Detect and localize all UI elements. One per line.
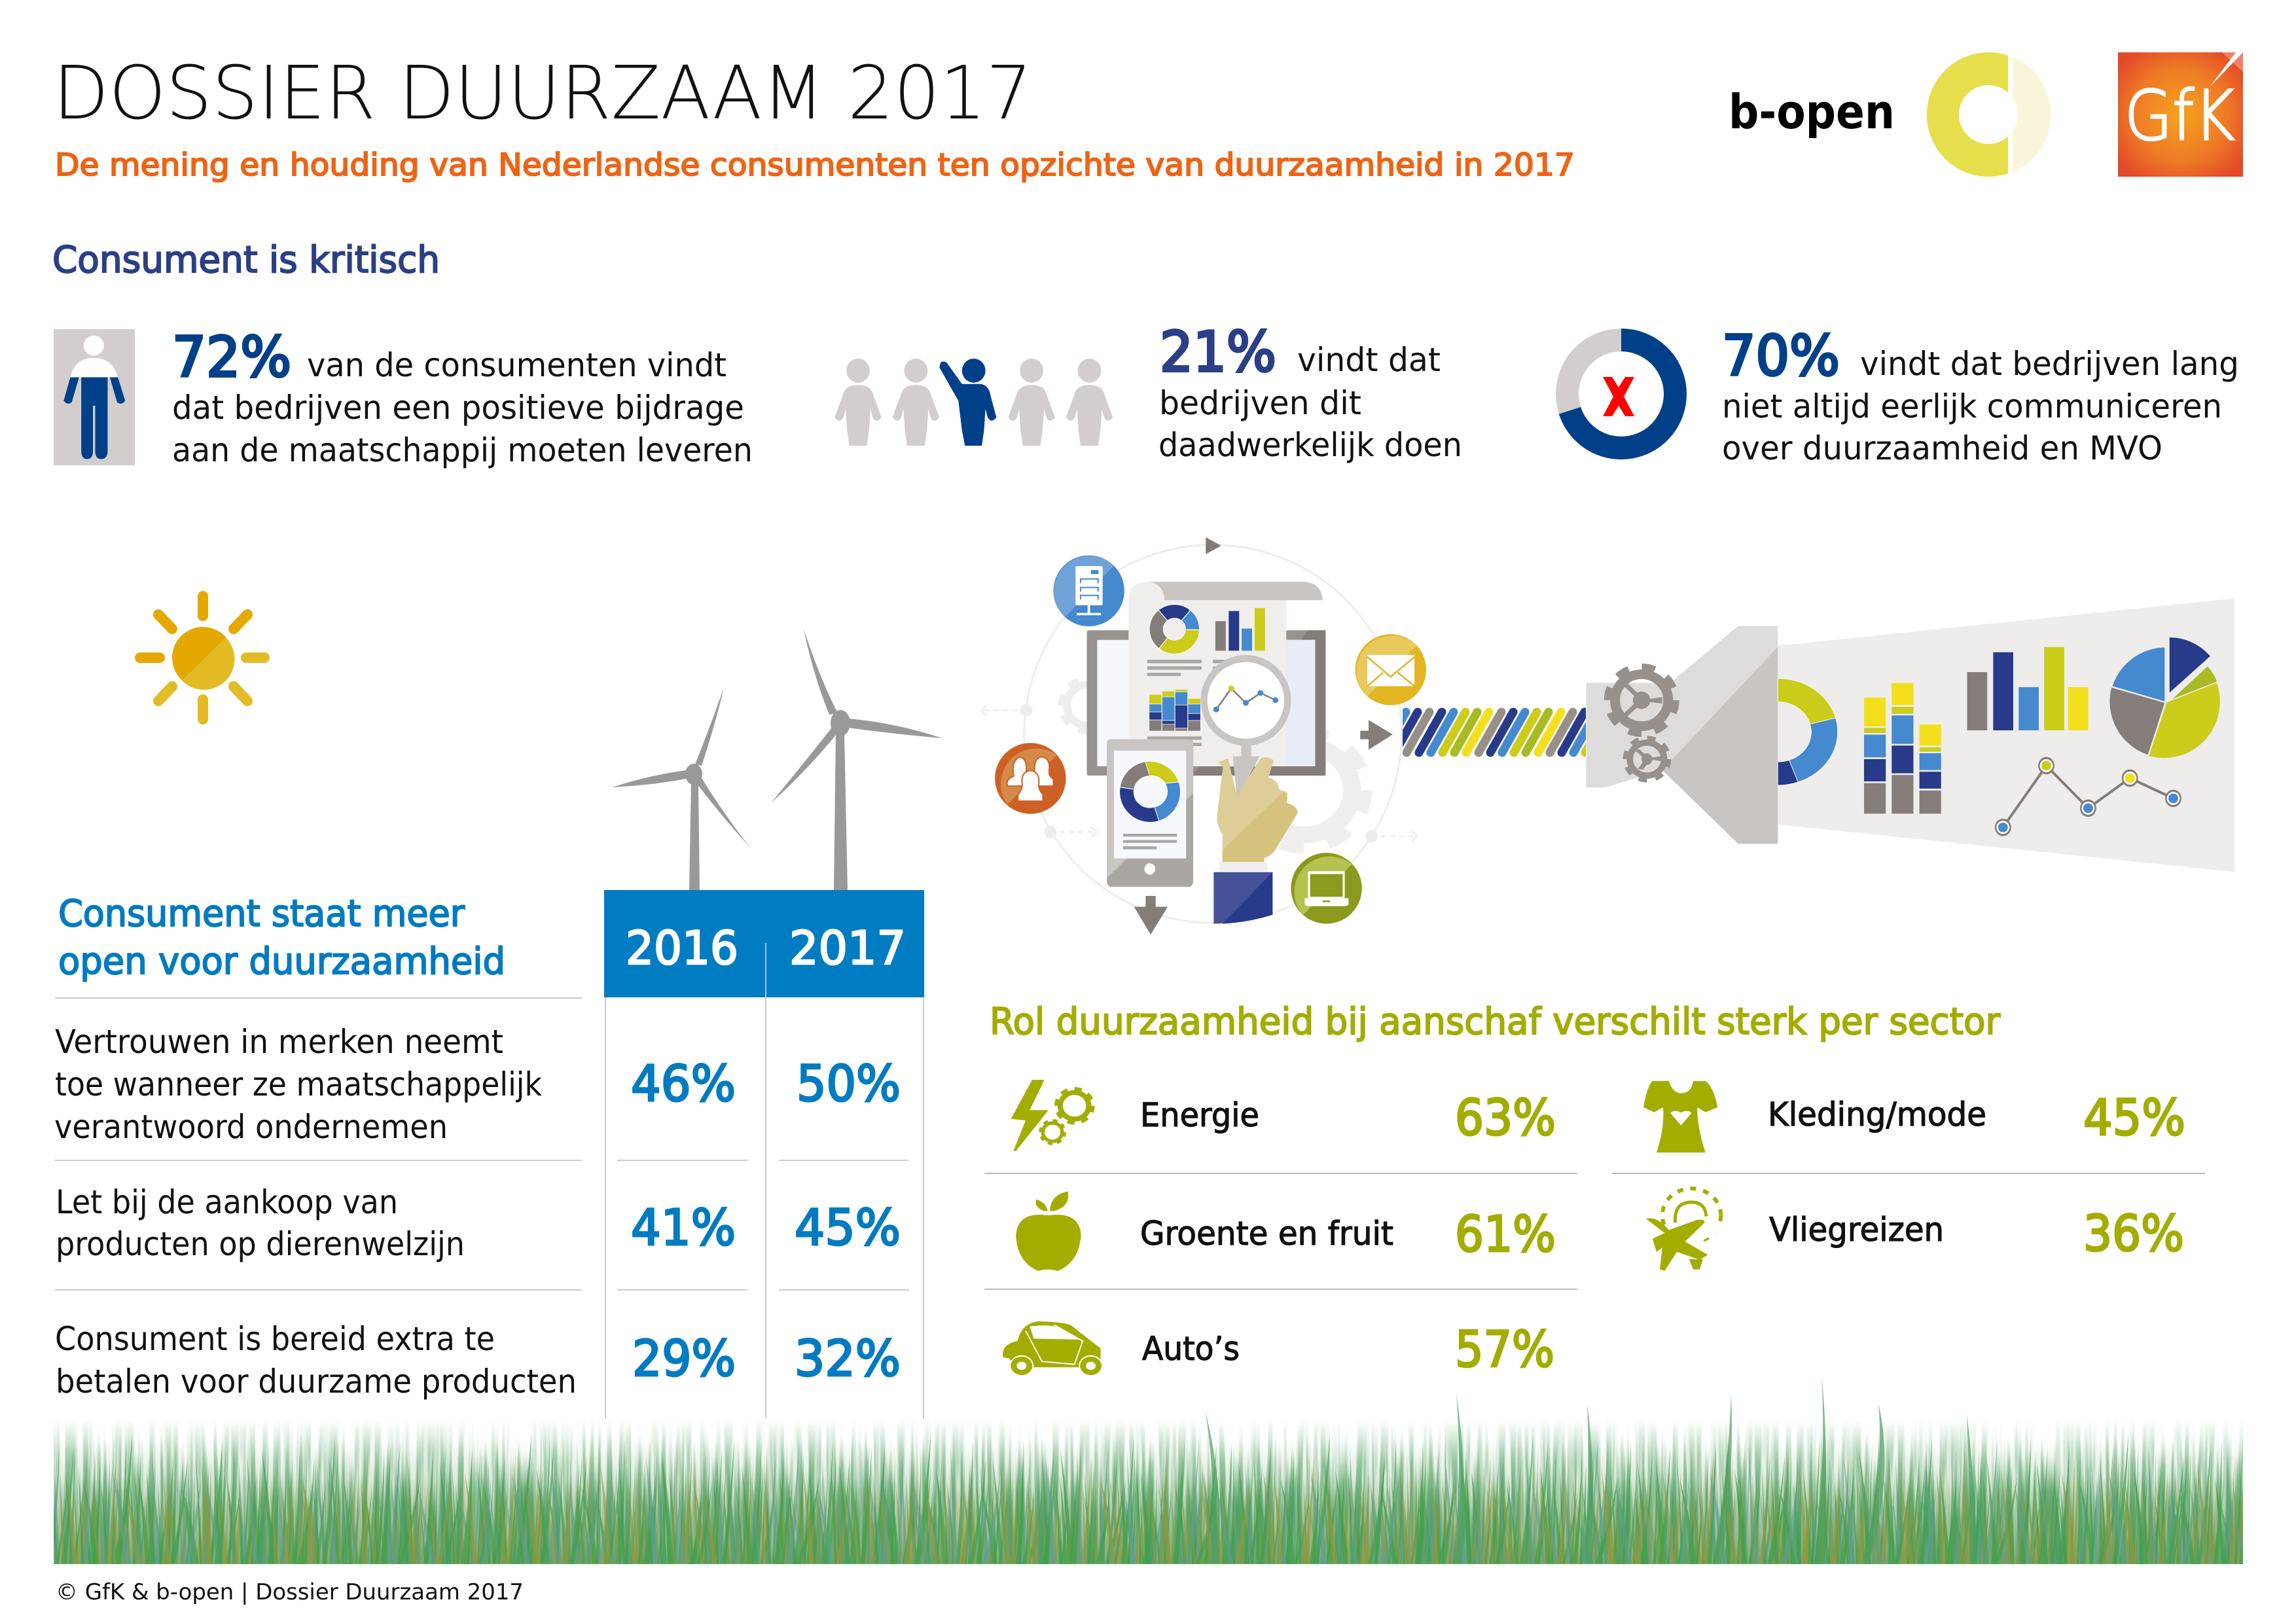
stat: 21 percent: 21% (1160, 320, 1276, 385)
stat: 72 percent: aan de maatschappij moeten leveren (172, 431, 753, 469)
stat: 70 percent: niet altijd eerlijk communiceren (1722, 387, 2222, 425)
stat: 70 percent: 70% (1722, 324, 1840, 389)
arrow: right (1360, 720, 1393, 750)
row: kleding (1643, 1081, 2185, 1152)
gears (1608, 668, 1675, 780)
row: kleding: Kleding/mode (1768, 1096, 1986, 1133)
icon: five people, one raised hand (834, 359, 1113, 446)
funnel (1587, 626, 1778, 844)
row: energie (1011, 1080, 1556, 1151)
row: vliegreizen: Vliegreizen (1769, 1211, 1944, 1249)
logo: GfK: GfK (2125, 76, 2234, 156)
row: extra betalen (55, 1320, 901, 1400)
icon: server (1053, 556, 1124, 626)
row: vertrouwen in merken: 46% (631, 1054, 736, 1113)
icon: people group (995, 743, 1066, 814)
line chart (1995, 757, 2181, 836)
row: vliegreizen (1646, 1188, 2184, 1271)
pie chart (2109, 637, 2220, 758)
footer copyright: © GfK & b-open | Dossier Duurzaam 2017 (56, 1579, 524, 1605)
stat: 21 percent: bedrijven dit (1159, 384, 1361, 422)
hand and sleeve (1213, 757, 1298, 924)
row: autos: Auto’s (1142, 1330, 1240, 1368)
row: autos: 57% (1455, 1320, 1554, 1378)
bar chart (1967, 647, 2088, 730)
heading: rol duurzaamheid: Rol duurzaamheid bij aanschaf verschilt sterk per sector (990, 1001, 2001, 1043)
stat: 72 percent: dat bedrijven een positieve bijdrage (172, 389, 744, 427)
row: groente en fruit (1016, 1192, 1556, 1271)
phone (1107, 740, 1193, 887)
stat: 70 percent (1722, 324, 2239, 467)
logo: b-open: b-open (1729, 84, 1895, 139)
row: vertrouwen in merken (54, 1023, 901, 1146)
report document (1128, 582, 1323, 766)
stat: 21 percent: vindt dat (1297, 341, 1441, 379)
light beam (1778, 598, 2234, 872)
subtitle: De mening en houding van Nederlandse consumenten ten opzichte van duurzaamheid in 2017 (55, 147, 1575, 183)
stat: 70 percent: over duurzaamheid en MVO (1722, 429, 2162, 467)
row: extra betalen: 29% (632, 1329, 736, 1387)
data stream ribbon (1383, 712, 1608, 753)
stat: 70 percent: vindt dat bedrijven lang (1860, 345, 2239, 383)
row: extra betalen: betalen voor duurzame producten (56, 1363, 577, 1400)
row: vertrouwen in merken: Vertrouwen in merken neemt (55, 1023, 503, 1061)
row: autos (1003, 1320, 1554, 1378)
row: vertrouwen in merken: verantwoord ondernemen (54, 1108, 448, 1146)
row: vertrouwen in merken: 50% (797, 1054, 901, 1113)
row: energie: Energie (1140, 1096, 1259, 1134)
row: vliegreizen: 36% (2083, 1204, 2184, 1262)
icon: mail (1355, 634, 1426, 705)
heading: consument staat meer open: open voor duurzaamheid (58, 940, 505, 983)
table header years: 2017 (789, 921, 906, 975)
row: dierenwelzijn: 41% (631, 1198, 736, 1257)
illustration: funnel with charts (1587, 598, 2234, 872)
icon: sun (140, 596, 264, 719)
row: dierenwelzijn: Let bij de aankoop van (56, 1183, 398, 1221)
row: dierenwelzijn: producten op dierenwelzijn (56, 1225, 465, 1263)
stat: 72 percent: 72% (172, 325, 291, 390)
heading: consument staat meer open: Consument staat meer (58, 893, 465, 935)
row: vertrouwen in merken: toe wanneer ze maatschappelijk (55, 1065, 542, 1103)
monitor (1086, 630, 1325, 776)
stat: 21 percent (1158, 320, 1462, 464)
row: dierenwelzijn (56, 1183, 901, 1263)
heading: consument staat meer open (58, 893, 505, 983)
stacked bars (1864, 683, 1941, 813)
icon: laptop (1291, 853, 1362, 924)
grass strip (54, 1374, 2243, 1564)
row: extra betalen: 32% (795, 1329, 901, 1387)
wind turbines (612, 629, 942, 890)
row: kleding: 45% (2083, 1088, 2185, 1147)
half donut chart (1778, 679, 1838, 785)
row: extra betalen: Consument is bereid extra te (55, 1320, 495, 1358)
table header years (604, 890, 924, 997)
row: groente en fruit: 61% (1455, 1205, 1556, 1263)
heading: consument is kritisch: Consument is kritisch (52, 239, 440, 281)
background gears (1062, 679, 1365, 847)
illustration: data collection circle (982, 537, 1426, 935)
icon: person 72 percent (54, 329, 135, 465)
arrow: down (1134, 896, 1168, 935)
stat: 21 percent: daadwerkelijk doen (1158, 426, 1462, 464)
stat: 72 percent: van de consumenten vindt (307, 346, 726, 384)
row: groente en fruit: Groente en fruit (1140, 1215, 1393, 1253)
logo: b-open (1729, 52, 2051, 177)
title: DOSSIER DUURZAAM 2017 (53, 51, 1032, 136)
magnifying glass (1201, 655, 1291, 799)
stat: 72 percent (172, 325, 753, 469)
row: dierenwelzijn: 45% (795, 1198, 901, 1257)
donut: 70 percent with red cross (1567, 340, 1676, 448)
row: energie: 63% (1455, 1088, 1556, 1147)
table header years: 2016 (626, 921, 738, 975)
logo: GfK (2118, 52, 2243, 177)
